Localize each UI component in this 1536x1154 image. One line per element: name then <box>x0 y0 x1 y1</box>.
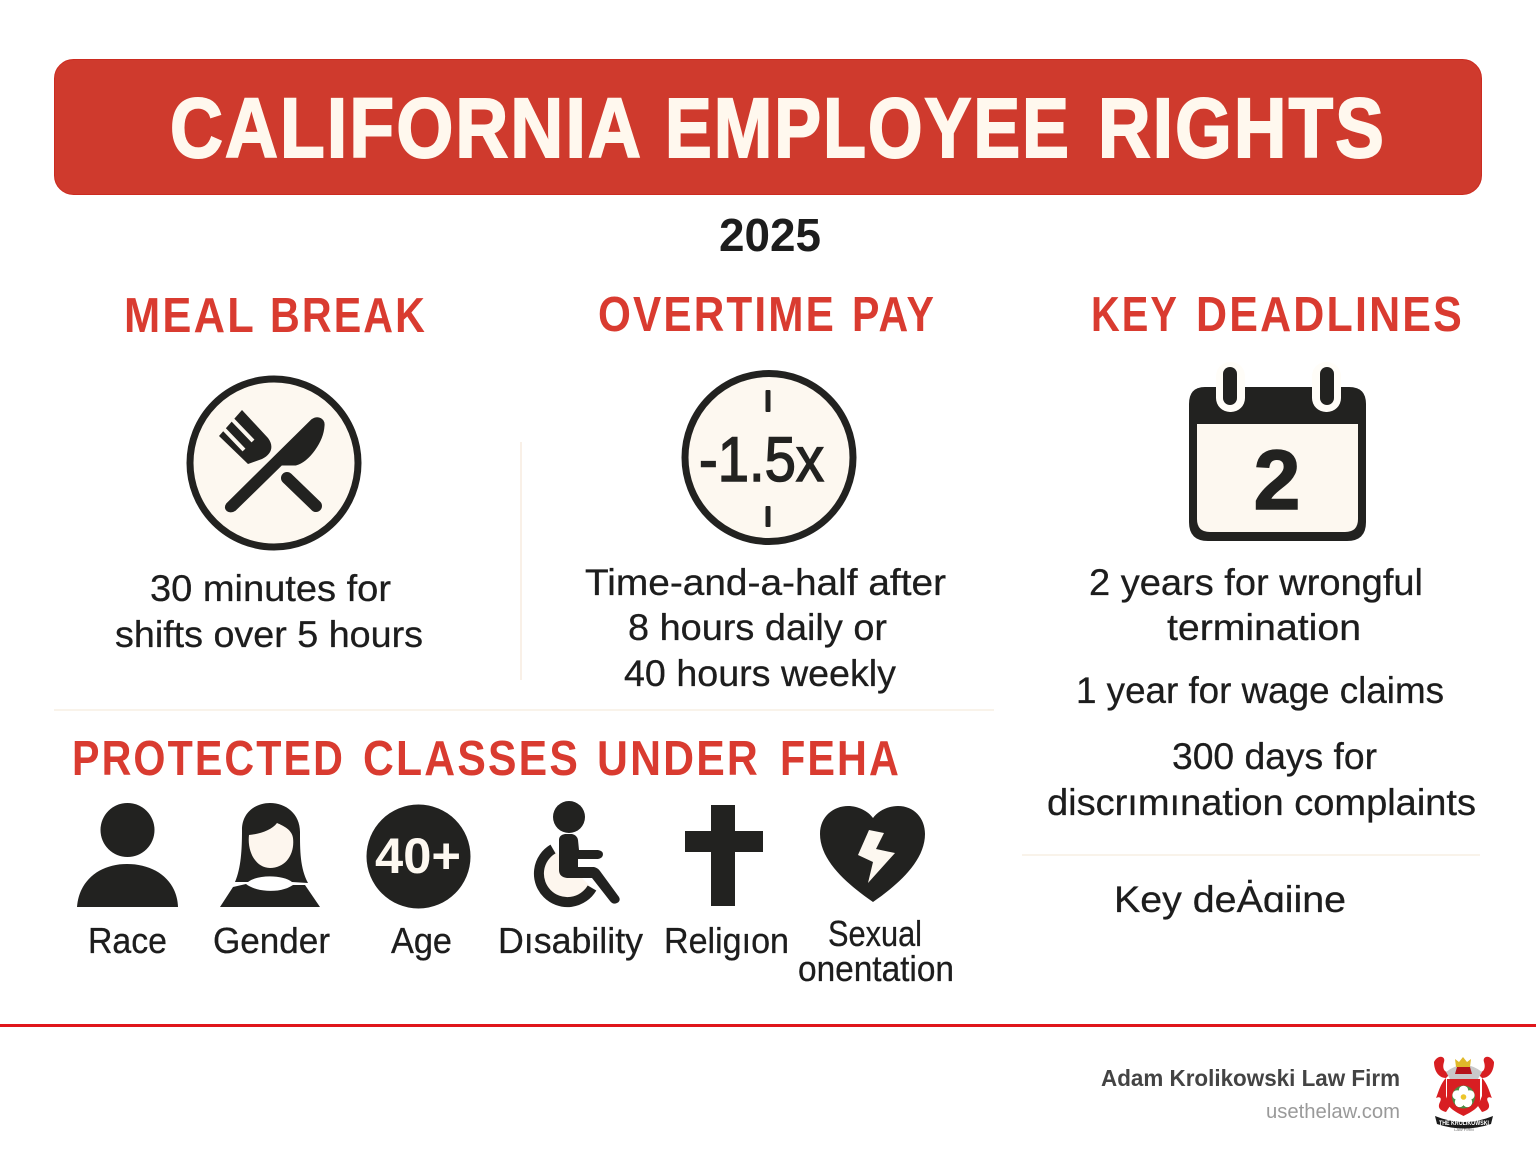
icon: fork and knife <box>190 379 358 547</box>
heading: key deadlines: KEY <box>1091 288 1179 342</box>
footer: firm name: Adam Krolikowski Law Firm <box>1101 1065 1400 1091</box>
heading: protected classes: UNDER <box>597 732 760 786</box>
label: sexual orientation <box>798 913 954 989</box>
logo: family crest: LAW FIRM <box>1454 1127 1474 1132</box>
text: overtime details: Time-and-a-half after <box>585 562 946 603</box>
icon: 1.5x overtime clock <box>685 374 853 542</box>
label: religion: Religıon <box>664 920 789 961</box>
title banner: RIGHTS <box>1098 81 1386 175</box>
text: deadlines list <box>1047 562 1476 823</box>
logo: family crest <box>1434 1057 1494 1132</box>
icon: age 40+ <box>366 804 470 908</box>
heading: protected classes: FEHA <box>780 732 901 786</box>
heading: protected classes: CLASSES <box>363 732 580 786</box>
heading: key deadlines: DEADLINES <box>1196 288 1464 342</box>
icon: gender person <box>220 803 320 907</box>
icon: calendar: 2 <box>1254 433 1300 527</box>
label: disability: Dısability <box>498 920 643 961</box>
footer: website: usethelaw.com <box>1266 1101 1400 1123</box>
text: deadlines list: 2 years for wrongful <box>1089 562 1423 603</box>
label: sexual orientation: Sexual <box>828 913 922 954</box>
title banner <box>54 60 1482 194</box>
heading: meal break <box>124 289 427 343</box>
icon: calendar <box>1189 362 1366 541</box>
icon: cross religion <box>685 805 763 906</box>
icon: 1.5x overtime clock: -1.5x <box>699 425 824 495</box>
text: key deadline: Key deȦɑiine <box>1114 879 1346 920</box>
text: overtime details: 40 hours weekly <box>624 653 896 694</box>
label: gender: Gender <box>213 920 330 961</box>
text: overtime details <box>585 562 946 694</box>
icon: heart with lightning <box>820 806 925 902</box>
heading: protected classes <box>72 732 901 786</box>
heading: overtime pay: PAY <box>852 288 936 342</box>
heading: protected classes: PROTECTED <box>72 732 345 786</box>
icon: race person <box>77 803 178 907</box>
label: race: Race <box>88 920 167 961</box>
heading: meal break: BREAK <box>270 289 427 343</box>
title banner: CALIFORNIA <box>170 81 643 175</box>
heading: meal break: MEAL <box>124 289 256 343</box>
text: meal break details: shifts over 5 hours <box>115 614 423 655</box>
label: sexual orientation: onentation <box>798 948 954 989</box>
text: meal break details <box>115 568 423 655</box>
title banner: EMPLOYEE <box>665 81 1071 175</box>
footer rule <box>0 1024 1536 1027</box>
logo: family crest: THE KROLIKOWSKI <box>1439 1121 1489 1127</box>
year: 2025 <box>719 209 821 261</box>
text: deadlines list: discrımınation complaints <box>1047 782 1476 823</box>
text: deadlines list: termination <box>1167 607 1361 648</box>
text: meal break details: 30 minutes for <box>150 568 391 609</box>
heading: overtime pay: OVERTIME <box>598 288 836 342</box>
text: overtime details: 8 hours daily or <box>628 607 887 648</box>
text: deadlines list: 1 year for wage claims <box>1076 670 1444 711</box>
icon: age 40+: 40+ <box>375 828 461 884</box>
heading: key deadlines <box>1091 288 1464 342</box>
icon: wheelchair disability <box>539 801 620 904</box>
label: age: Age <box>391 920 452 961</box>
text: deadlines list: 300 days for <box>1172 736 1377 777</box>
